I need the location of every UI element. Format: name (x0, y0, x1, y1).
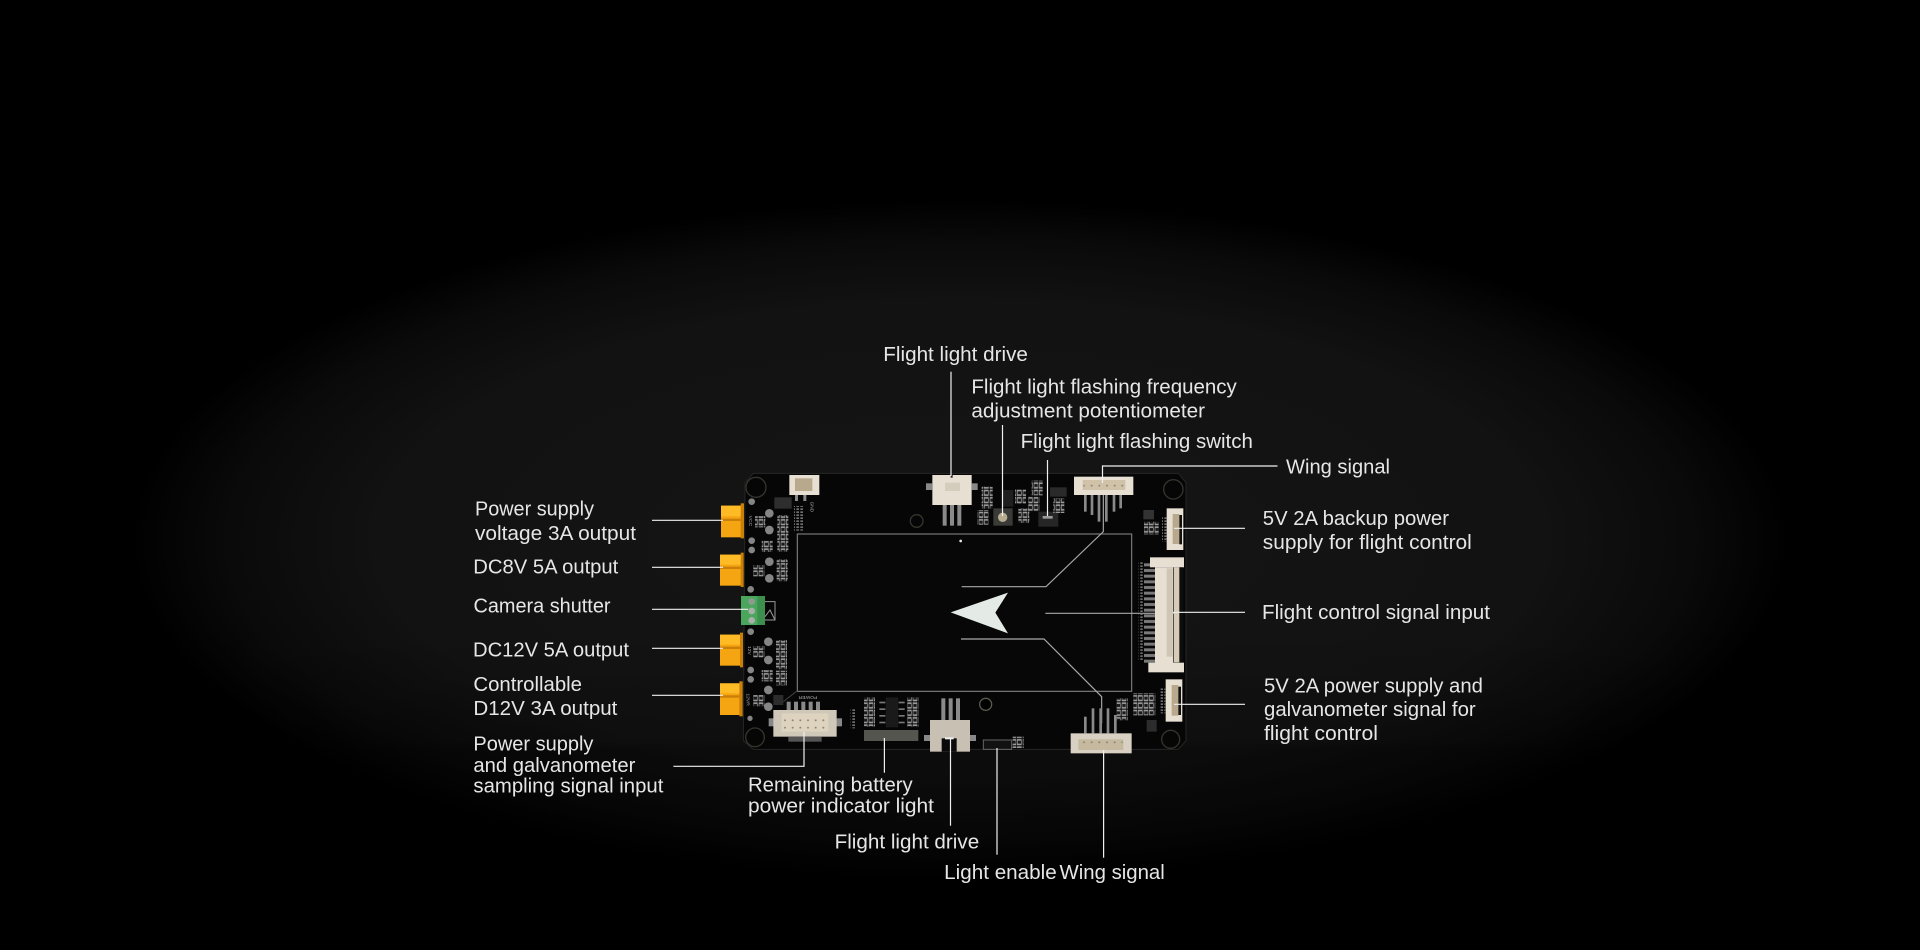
right upper small connector (1143, 508, 1183, 550)
callout: controllable D12V 3A output (473, 674, 723, 720)
callout: DC12V 5A output: DC12V 5A output (473, 640, 629, 662)
callout: power supply and galvanometer sampling signal input: Power supply (473, 734, 593, 756)
callout: 5V 2A power supply and galvanometer signal: 5V 2A power supply and (1264, 675, 1483, 697)
corner trace (783, 691, 797, 702)
callout: camera shutter: Camera shutter (474, 595, 611, 617)
inner outline rectangle (797, 534, 1132, 691)
callout: top flight light drive: Flight light drive (883, 344, 1028, 366)
left side components: 12VR (745, 693, 751, 706)
callout: power supply and galvanometer sampling signal input (473, 732, 804, 798)
large flight control connector (1139, 557, 1184, 672)
callout: remaining battery power indicator light (748, 738, 934, 818)
callout: flashing frequency adjustment potentiometer: adjustment potentiometer (971, 400, 1205, 422)
bottom wing connector (1071, 708, 1132, 753)
callout: bottom wing signal: Wing signal (1060, 862, 1165, 884)
callout: top wing signal: Wing signal (1286, 456, 1390, 478)
callout: light enable (944, 748, 1057, 884)
left side components: VCC (747, 516, 753, 527)
left side components (745, 497, 803, 721)
callout: flight control signal input: Flight control signal input (1262, 602, 1490, 624)
callout: DC8V 5A output: DC8V 5A output (473, 556, 619, 578)
callout: controllable D12V 3A output: D12V 3A output (473, 698, 618, 720)
callout: top wing signal (1102, 456, 1390, 483)
callout: 5V 2A power supply and galvanometer signal: flight control (1264, 723, 1378, 745)
callout: light enable: Light enable (944, 862, 1057, 884)
top left connector (789, 475, 819, 513)
light enable header (983, 737, 1024, 749)
callout: power supply voltage 3A output: voltage 3A output (475, 523, 636, 545)
callout: power supply voltage 3A output: Power supply (475, 499, 594, 521)
callout: remaining battery power indicator light: power indicator light (748, 796, 934, 818)
arrow (951, 593, 1008, 633)
green camera terminal (741, 596, 775, 625)
callout: power supply and galvanometer sampling signal input: and galvanometer (473, 755, 636, 777)
callout: controllable D12V 3A output: Controllable (473, 674, 582, 696)
right lower small connector (1117, 679, 1182, 732)
top left connector: GND (810, 502, 815, 513)
power connector: POWER (798, 694, 817, 700)
callout: power supply voltage 3A output (475, 499, 723, 545)
yellow power connectors (720, 503, 744, 716)
callout: 5V 2A power supply and galvanometer signal: galvanometer signal for (1264, 699, 1476, 721)
mounting holes (746, 477, 1183, 748)
callout: flashing frequency adjustment potentiometer: Flight light flashing frequency (971, 376, 1237, 398)
bottom flight light drive connector (924, 698, 976, 752)
power connector (769, 694, 842, 742)
callout: 5V 2A backup power (1174, 508, 1472, 554)
speck dot (959, 540, 962, 542)
callout: flashing switch: Flight light flashing switch (1021, 431, 1253, 453)
battery indicator LEDs and IC (851, 697, 918, 741)
callout: 5V 2A backup power: 5V 2A backup power (1263, 508, 1449, 530)
callout: remaining battery power indicator light: Remaining battery (748, 774, 913, 796)
top wing connector (1074, 477, 1133, 522)
callout: 5V 2A backup power: supply for flight control (1263, 532, 1472, 554)
panel: PCB (743, 473, 1186, 749)
potentiometer and switch cluster (977, 481, 1067, 527)
top flight light drive connector (926, 475, 978, 526)
callout: power supply and galvanometer sampling signal input: sampling signal input (473, 776, 664, 798)
callout: flashing frequency adjustment potentiometer (971, 376, 1237, 516)
board traces (961, 495, 1175, 723)
callout: bottom wing signal (1060, 750, 1165, 884)
left side components: 12V (746, 646, 752, 656)
callout: 5V 2A power supply and galvanometer signal (1174, 675, 1483, 745)
circuit board photo (720, 473, 1186, 753)
callout: bottom flight light drive: Flight light drive (835, 832, 979, 854)
